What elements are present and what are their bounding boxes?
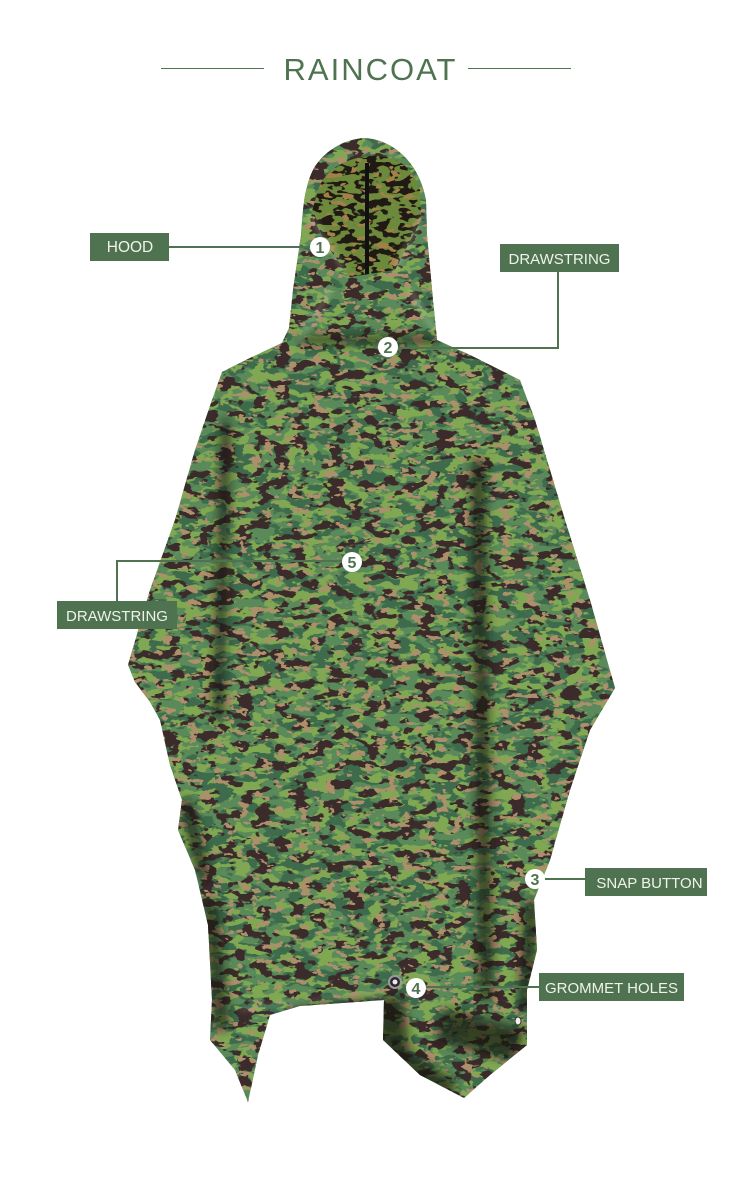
callout 3: snap button	[525, 868, 707, 896]
callout 2: drawstring: DRAWSTRING	[509, 251, 610, 268]
callout 4: grommet holes	[406, 973, 684, 1001]
callout 5: drawstring: DRAWSTRING	[66, 608, 168, 625]
callout 1: hood	[90, 233, 330, 261]
grommet at corner	[515, 1017, 521, 1025]
callout 5: drawstring	[57, 552, 362, 629]
hood interior	[311, 156, 421, 277]
garment folds and shading	[185, 340, 532, 1095]
callout 4: grommet holes: 4	[412, 981, 421, 998]
callout 4: grommet holes: GROMMET HOLES	[545, 980, 678, 997]
callout 1: hood: HOOD	[107, 239, 153, 256]
callout 3: snap button: 3	[531, 872, 540, 889]
raincoat photo: camouflage poncho	[120, 130, 620, 1110]
title: RAINCOAT	[284, 52, 457, 87]
callout 2: drawstring: 2	[384, 340, 393, 357]
grommet at hem	[389, 976, 401, 988]
callout 1: hood: 1	[316, 240, 325, 257]
callout 5: drawstring: 5	[348, 555, 357, 572]
callout 2: drawstring	[378, 244, 619, 357]
callout 3: snap button: SNAP BUTTON	[596, 875, 703, 892]
